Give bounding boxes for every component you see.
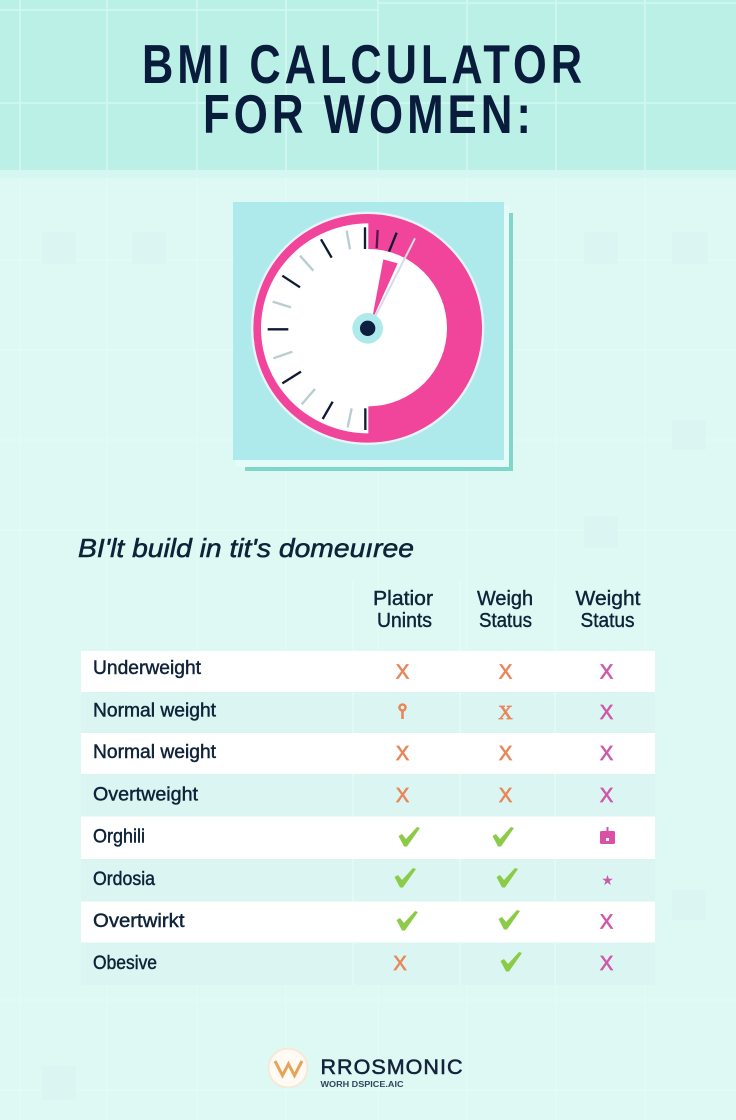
dial ticks — [268, 227, 397, 430]
orange cross marks: X — [396, 662, 409, 684]
table column headers — [373, 588, 641, 632]
table row labels: Normal weight — [93, 741, 217, 763]
subtitle: BI'lt build in tit's domeuıree — [78, 533, 414, 563]
pink cross marks: X — [600, 743, 613, 765]
table row labels: Orghili — [93, 826, 145, 848]
pink cross marks: X — [600, 702, 613, 724]
table row labels: Overtwirkt — [93, 910, 185, 932]
table row labels: Normal weight — [93, 700, 217, 722]
orange cross marks: X — [393, 953, 407, 975]
footer logo — [268, 1048, 464, 1089]
pink cross marks: X — [600, 785, 613, 807]
title: BMI CALCULATOR — [142, 33, 586, 95]
icon: logo badge — [268, 1048, 308, 1088]
brand name: RROSMONIC — [320, 1056, 464, 1079]
panel: gauge card — [233, 202, 513, 471]
panel: comparison table — [81, 580, 655, 985]
table row labels: Overtweight — [93, 784, 199, 806]
gauge hub — [352, 313, 383, 344]
table row labels: Underweight — [93, 657, 202, 679]
orange cross marks: X — [396, 785, 409, 807]
orange cross marks: X — [396, 743, 409, 765]
table row labels: Obesive — [93, 952, 157, 974]
title — [142, 33, 586, 145]
pink cross marks: X — [600, 912, 613, 934]
orange cross marks: X — [498, 702, 513, 724]
pink cross marks — [600, 662, 613, 975]
table row backgrounds — [81, 580, 655, 985]
icon: pink box — [600, 827, 615, 844]
table row labels: Ordosia — [93, 868, 155, 890]
gauge needle — [372, 238, 415, 323]
title: FOR WOMEN: — [203, 83, 535, 145]
orange cross marks: X — [499, 743, 512, 765]
table column headers: Unints — [377, 610, 432, 632]
table column headers: Weigh — [477, 588, 533, 610]
pink cross marks: X — [600, 662, 613, 684]
table column headers: Platior — [373, 588, 433, 610]
icon: pink star: ★ — [601, 873, 614, 889]
table column headers: Status — [580, 610, 634, 632]
green check marks — [394, 827, 522, 972]
orange cross marks: X — [499, 662, 512, 684]
table row labels — [93, 657, 217, 974]
pink cross marks: X — [600, 953, 613, 975]
orange cross marks: X — [499, 785, 512, 807]
gauge dial — [251, 212, 484, 445]
icon: orange key mark — [400, 704, 406, 719]
orange cross marks — [393, 662, 513, 975]
table column headers: Weight — [576, 588, 641, 610]
brand tagline: WORH DSPICE.AIC — [320, 1080, 404, 1089]
table column headers: Status — [479, 610, 532, 632]
header band — [0, 0, 736, 178]
